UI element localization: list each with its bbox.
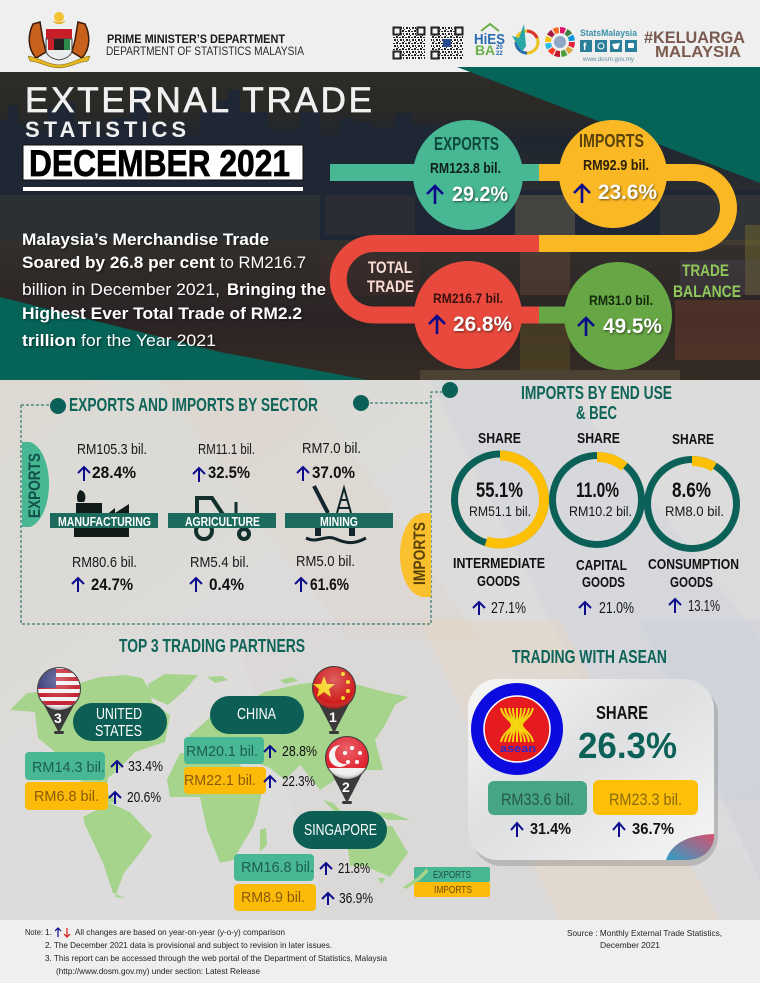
pin: China <box>312 666 356 734</box>
source <box>567 928 722 950</box>
partner: China: 22.3% <box>282 773 315 790</box>
trade balance label: BALANCE <box>673 282 741 301</box>
exports values <box>77 440 361 482</box>
department name <box>106 32 304 58</box>
summary paragraph: trillion <box>22 331 76 350</box>
imports value box: RM22.1 bil. <box>184 772 256 789</box>
imports value box <box>25 782 108 810</box>
logo: SDG wheel <box>548 30 572 54</box>
exports values: 28.4% <box>92 463 136 482</box>
icon: ASEAN logo: asean <box>500 743 536 755</box>
summary paragraph: to RM216.7 <box>220 253 306 272</box>
logo: StatsMalaysia social: f <box>583 42 587 53</box>
share: SHARE <box>596 703 648 723</box>
logo: Keluarga Malaysia <box>644 28 745 61</box>
notes: 3. This report can be accessed through the web portal of the Department of Statistics, Malaysia <box>45 953 387 963</box>
donut: capital goods: 21.0% <box>599 600 634 617</box>
summary paragraph <box>22 230 326 350</box>
imports value box <box>234 884 316 911</box>
name pill <box>293 811 387 849</box>
notes: All changes are based on year-on-year (y-o-y) comparison <box>75 927 285 937</box>
title block: STATISTICS <box>25 117 186 142</box>
donut: intermediate goods: RM51.1 bil. <box>469 503 531 519</box>
summary paragraph: for the Year 2021 <box>81 331 216 350</box>
name pill: STATES <box>95 723 142 740</box>
coat of arms <box>28 12 90 68</box>
icon: oil rig <box>306 486 366 543</box>
exports values: 37.0% <box>312 463 355 482</box>
circle: total trade: 26.8% <box>453 313 512 336</box>
icon: QR code 1 <box>393 27 425 59</box>
logo: HIES BA 2022: 20 <box>496 45 503 51</box>
donut: capital goods: SHARE <box>577 430 620 447</box>
circle: imports: IMPORTS <box>579 131 644 151</box>
label: manufacturing: MANUFACTURING <box>58 514 151 529</box>
circle: exports: EXPORTS <box>434 134 499 154</box>
heading <box>521 383 672 423</box>
imports value: RM23.3 bil. <box>609 790 682 809</box>
circle: exports: 29.2% <box>452 183 508 206</box>
summary paragraph: Soared by 26.8 per cent <box>22 253 215 272</box>
icon: QR code 2 <box>431 27 463 59</box>
pin: China: 1 <box>329 709 337 725</box>
donut: capital goods: RM10.2 bil. <box>569 503 632 519</box>
notes <box>25 927 387 976</box>
imports value box: RM6.8 bil. <box>34 788 99 805</box>
donut: intermediate goods: GOODS <box>477 573 520 590</box>
header logos <box>28 12 745 68</box>
pin: United States <box>37 667 81 734</box>
circle: imports: 23.6% <box>598 181 657 204</box>
imports values: 61.6% <box>310 575 349 594</box>
logo: StatsMalaysia social <box>580 28 638 63</box>
teal corner wedge top right <box>457 67 760 183</box>
partner: Singapore: 36.9% <box>339 890 373 907</box>
logo: HIES BA 2022: BA <box>475 42 495 58</box>
notes: 1. <box>45 927 52 937</box>
partner: Singapore <box>234 811 387 911</box>
logo: HIES BA 2022: HiES <box>474 31 505 48</box>
circle: exports: RM123.8 bil. <box>430 160 501 177</box>
partner: China: 28.8% <box>282 743 317 760</box>
summary paragraph: billion in December 2021, <box>22 280 220 299</box>
logo: StatsMalaysia social: StatsMalaysia <box>580 28 638 38</box>
title block <box>23 81 372 191</box>
panel: ASEAN card <box>468 679 718 866</box>
imports tab <box>400 513 431 597</box>
donut: capital goods: GOODS <box>582 574 625 591</box>
exports tab <box>22 442 49 527</box>
circle: imports: RM92.9 bil. <box>583 157 649 174</box>
circle: imports <box>559 120 667 228</box>
heading: EXPORTS AND IMPORTS BY SECTOR <box>69 395 318 415</box>
imports values: 0.4% <box>209 575 244 594</box>
source: Source : Monthly External Trade Statistics, <box>567 928 722 938</box>
summary paragraph: Bringing the <box>227 280 326 299</box>
notes: Note: <box>25 927 43 937</box>
name pill: SINGAPORE <box>304 822 377 839</box>
logo: statistics ring <box>512 24 538 53</box>
notes: 2. The December 2021 data is provisional and subject to revision in later issues. <box>45 940 332 950</box>
name pill: UNITED <box>96 706 142 723</box>
donut: consumption goods <box>648 431 739 615</box>
imports values: 24.7% <box>91 575 133 594</box>
circle: total trade: RM216.7 bil. <box>433 290 503 306</box>
exports values: RM7.0 bil. <box>302 440 361 457</box>
header band <box>0 0 760 72</box>
label: agriculture: AGRICULTURE <box>185 514 260 529</box>
circle: exports <box>413 120 523 230</box>
heading: & BEC <box>576 403 617 423</box>
pin: Singapore <box>325 736 369 804</box>
exports value: RM33.6 bil. <box>501 790 574 809</box>
logo: StatsMalaysia social: www.dosm.gov.my <box>582 57 634 63</box>
imports value <box>593 780 698 838</box>
donut: intermediate goods: SHARE <box>478 430 521 447</box>
lower background photo <box>0 380 760 920</box>
label: mining: MINING <box>320 514 358 529</box>
donut: consumption goods: GOODS <box>670 574 713 591</box>
circle: total trade <box>414 261 522 369</box>
total trade label: TRADE <box>367 277 414 296</box>
dashed panel frame with dots <box>21 382 458 624</box>
source: December 2021 <box>600 940 660 950</box>
name pill <box>73 703 167 741</box>
heading: IMPORTS BY END USE <box>521 383 672 403</box>
legend: exports and imports: EXPORTS <box>433 870 471 881</box>
donut: intermediate goods <box>453 430 546 617</box>
world map <box>10 674 410 898</box>
circle: trade balance: RM31.0 bil. <box>589 292 653 308</box>
exports value <box>488 781 587 838</box>
exports value box: RM16.8 bil. <box>241 859 314 876</box>
notes: (http://www.dosm.gov.my) under section: Latest Release <box>56 966 260 976</box>
trade balance label: TRADE <box>682 261 729 280</box>
share: 26.3% <box>578 725 677 766</box>
trade flow ribbon <box>330 172 728 315</box>
trade balance label <box>673 261 741 301</box>
donut: capital goods <box>552 430 642 617</box>
title block: EXTERNAL TRADE <box>25 81 372 120</box>
circle: trade balance: 49.5% <box>603 315 662 338</box>
imports values: RM5.0 bil. <box>296 553 355 570</box>
donut: consumption goods: SHARE <box>672 431 714 448</box>
logo: Keluarga Malaysia: MALAYSIA <box>655 44 741 61</box>
exports value box <box>25 752 105 780</box>
donut: consumption goods: CONSUMPTION <box>648 556 739 573</box>
partner: United States: 20.6% <box>127 789 161 806</box>
label: mining <box>285 513 393 529</box>
panel: exports and imports by sector <box>22 395 431 597</box>
partner: Singapore: 21.8% <box>338 860 370 877</box>
partner: United States: 33.4% <box>128 758 163 775</box>
donut: consumption goods: 8.6% <box>672 479 711 502</box>
imports values: RM5.4 bil. <box>190 554 249 571</box>
logo: Keluarga Malaysia: #KELUARGA <box>644 28 745 47</box>
donut: capital goods: CAPITAL <box>576 557 627 574</box>
corner decoration <box>666 834 714 860</box>
pin: United States: 3 <box>54 710 62 726</box>
exports tab: EXPORTS <box>25 453 44 518</box>
total trade label <box>367 258 414 296</box>
legend: exports and imports <box>403 867 490 897</box>
summary paragraph: Highest Ever Total Trade of RM2.2 <box>22 304 302 323</box>
partner: China <box>184 696 317 794</box>
donut: consumption goods: 13.1% <box>688 598 720 615</box>
exports value: 31.4% <box>530 821 571 838</box>
donut: intermediate goods: 55.1% <box>476 479 523 502</box>
icon: tractor <box>196 498 250 539</box>
legend: exports and imports: IMPORTS <box>434 885 472 896</box>
total trade label: TOTAL <box>368 258 412 277</box>
donut: intermediate goods: 27.1% <box>491 600 526 617</box>
pin: Singapore: 2 <box>342 779 350 795</box>
title block: DECEMBER 2021 <box>29 143 290 184</box>
panel: imports by end use and BEC <box>453 383 739 617</box>
imports values: RM80.6 bil. <box>72 554 137 571</box>
share <box>578 703 677 766</box>
exports values: RM105.3 bil. <box>77 441 147 458</box>
exports value box: RM20.1 bil. <box>186 743 258 760</box>
hero background photo <box>0 72 760 380</box>
donut: intermediate goods: INTERMEDIATE <box>453 555 545 572</box>
department name: PRIME MINISTER’S DEPARTMENT <box>107 32 286 46</box>
exports values: 32.5% <box>208 463 250 482</box>
exports value box <box>234 854 314 881</box>
heading: trading with ASEAN: TRADING WITH ASEAN <box>512 647 667 667</box>
logo: HIES BA 2022: 22 <box>496 51 503 57</box>
imports values <box>72 553 355 594</box>
donut: consumption goods: RM8.0 bil. <box>665 503 724 519</box>
footer band <box>0 920 760 983</box>
donut: capital goods: 11.0% <box>576 479 619 502</box>
exports values: RM11.1 bil. <box>198 441 255 458</box>
heading: top 3 trading partners: TOP 3 TRADING PARTNERS <box>119 636 305 656</box>
imports tab: IMPORTS <box>410 522 429 585</box>
imports value: 36.7% <box>632 821 674 838</box>
summary paragraph: Malaysia’s Merchandise Trade <box>22 230 269 249</box>
partner: United States <box>25 703 167 810</box>
exports value box: RM14.3 bil. <box>32 759 105 776</box>
logo: HIES BA 2022 <box>474 24 505 58</box>
department name: DEPARTMENT OF STATISTICS MALAYSIA <box>106 44 304 58</box>
icon: ASEAN logo <box>471 683 563 775</box>
icon: factory <box>74 490 129 537</box>
name pill: CHINA <box>237 706 276 723</box>
imports value box: RM8.9 bil. <box>241 889 305 906</box>
teal wedge bottom left <box>0 297 378 382</box>
circle: trade balance <box>564 262 672 370</box>
